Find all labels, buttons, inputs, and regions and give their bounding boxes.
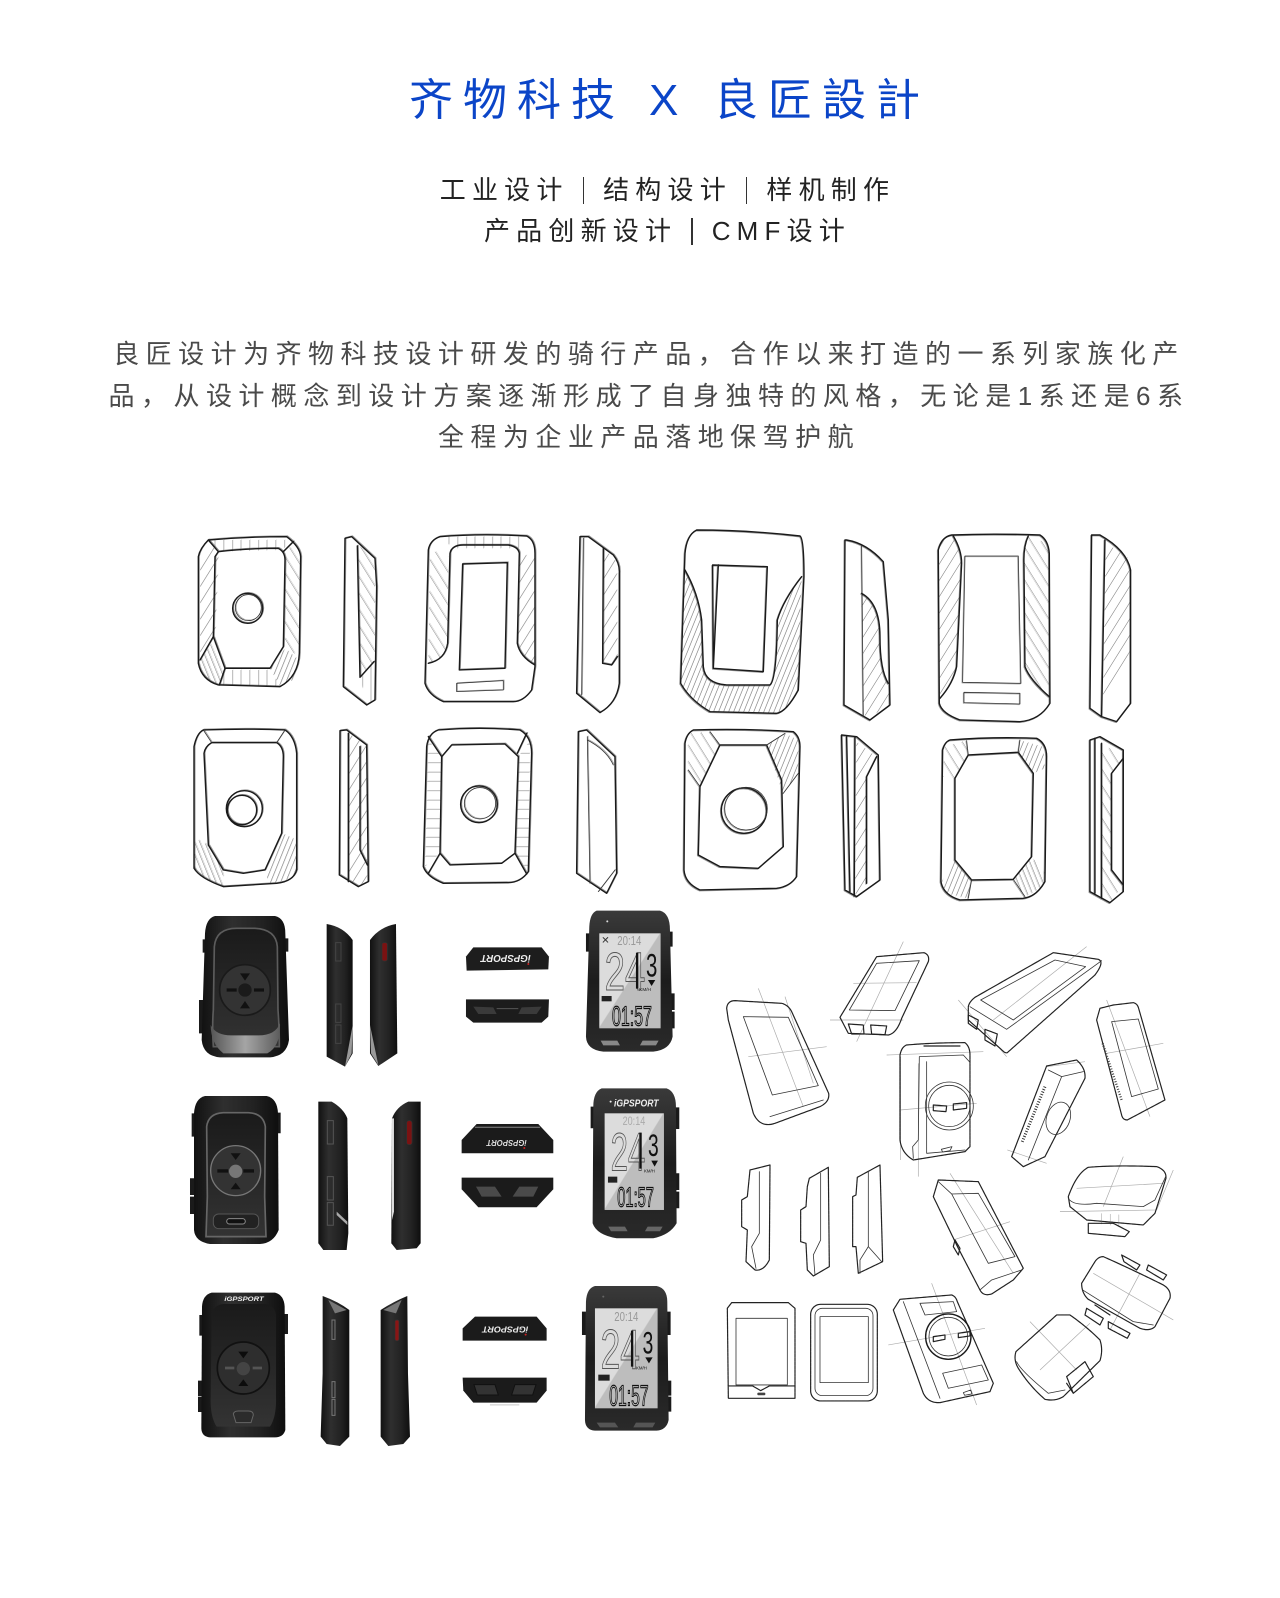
device 3 top edge: iGPSPORT <box>482 1325 528 1335</box>
device 2 screen front: KM/H <box>644 1168 655 1173</box>
device 3 back view <box>198 1293 288 1437</box>
device 2 left side <box>318 1102 348 1250</box>
device 3 bottom edge <box>463 1378 547 1406</box>
sketch: screen front E <box>681 530 804 713</box>
body paragraph: 良匠设计为齐物科技设计研发的骑行产品，合作以来打造的一系列家族化产 <box>113 339 1185 369</box>
device 3 screen front: 3 <box>643 1325 653 1360</box>
body paragraph <box>109 339 1189 452</box>
device 1 bottom edge <box>466 999 549 1023</box>
sketch 13: sensor top <box>1082 1255 1173 1338</box>
device 1 top edge: iGPSPORT <box>480 952 531 963</box>
body paragraph: 全程为企业产品落地保驾护航 <box>438 422 860 452</box>
subtitle: services: 工业设计 结构设计 样机制作 <box>440 175 895 205</box>
device 2 top edge: iGPSPORT <box>486 1138 527 1148</box>
sketch 3: wide perspective <box>958 947 1102 1057</box>
device 1 screen front: 20:14 <box>617 934 641 948</box>
sketch: side view C <box>339 730 368 887</box>
sketch: side view B <box>577 537 619 713</box>
sketch 10: plain front A <box>727 1303 795 1398</box>
sketch: round-button front C <box>194 729 297 887</box>
subtitle: services: 产品创新设计 CMF设计 <box>484 216 851 246</box>
sketch: side view G <box>842 735 880 897</box>
device 2 screen front: 01:57 <box>617 1182 654 1213</box>
device 2 right side <box>391 1102 421 1250</box>
sketch: side view E <box>844 540 890 720</box>
device 1 screen front: KM/H <box>639 987 651 992</box>
sketch 8: tilted front <box>933 1173 1023 1295</box>
device 1 top edge <box>466 947 549 971</box>
title: X <box>649 76 688 125</box>
device 1 screen front: ✕ <box>601 935 610 946</box>
sketch: side view A <box>343 537 377 705</box>
sketches: right pair of top rows <box>681 530 1131 903</box>
sketch 5: back view with mount <box>887 1043 983 1177</box>
sketch 1: tilted device <box>727 988 829 1125</box>
title: 齐物科技 <box>409 76 625 125</box>
device 3 screen front: 20:14 <box>614 1310 638 1324</box>
body paragraph: 品，从设计概念到设计方案逐渐形成了自身独特的风格，无论是1系还是6系 <box>109 381 1189 411</box>
sketch 2: angled top view <box>830 942 929 1042</box>
subtitle: services <box>440 175 895 246</box>
device 1 screen front: 3 <box>646 948 657 984</box>
product row 2 <box>190 1088 679 1250</box>
device 3 screen front: KM/H <box>636 1365 647 1370</box>
concept sketches cluster <box>727 942 1173 1405</box>
device 2 screen front <box>591 1088 679 1238</box>
device 2 screen front: iGPSPORT <box>614 1099 659 1110</box>
sketch: side view D <box>577 730 617 893</box>
sketch: round-button front D <box>423 728 532 883</box>
sketch: side view F <box>1090 535 1131 722</box>
sketches: left pair of top rows <box>194 535 619 893</box>
sketch: round-button front A <box>198 537 301 687</box>
sketch 12: tilted back with panels <box>888 1283 993 1405</box>
product row 3 <box>198 1286 671 1446</box>
sketch: screen front F <box>938 534 1050 722</box>
device 2 top edge <box>462 1124 553 1153</box>
device 3 screen front: 01:57 <box>609 1380 649 1412</box>
device 2 back view <box>190 1096 281 1244</box>
title <box>409 76 930 125</box>
device 2 screen front: 24 <box>611 1123 645 1183</box>
device 3 screen front <box>582 1286 671 1431</box>
title: 良匠設計 <box>714 76 930 125</box>
device 2 screen front: 3 <box>648 1128 659 1163</box>
device 2 screen front: 20:14 <box>623 1114 646 1128</box>
device 1 left side <box>327 924 353 1067</box>
device 1 back view <box>199 916 289 1057</box>
sketch: round-corner front H <box>941 738 1047 900</box>
sketch: screen front B <box>425 535 535 702</box>
sketch 9: sensor with clip <box>1060 1157 1173 1237</box>
device 3 back view: iGPSPORT <box>224 1296 265 1303</box>
sketch: side view H <box>1090 737 1123 903</box>
sketch 14: sensor bottom <box>1015 1315 1102 1400</box>
device 2 bottom edge <box>462 1178 553 1207</box>
product row 1 <box>199 911 675 1067</box>
device 1 right side <box>370 924 397 1066</box>
sketch 11: plain front B <box>811 1304 877 1401</box>
device 3 top edge <box>463 1317 547 1341</box>
device 3 left side <box>321 1296 349 1446</box>
sketch 4: right tilted device <box>1097 1000 1165 1120</box>
device 1 screen front: 01:57 <box>612 1000 652 1031</box>
sketch: round-button front G <box>684 729 800 890</box>
sketch 6: tilted back view <box>1007 1060 1085 1167</box>
device 3 right side <box>381 1296 410 1446</box>
device 1 screen front <box>586 911 675 1052</box>
device 3 screen front: 24 <box>601 1319 640 1381</box>
device 1 screen front: 24 <box>605 942 645 1002</box>
sketch 7: three side views <box>742 1165 883 1276</box>
